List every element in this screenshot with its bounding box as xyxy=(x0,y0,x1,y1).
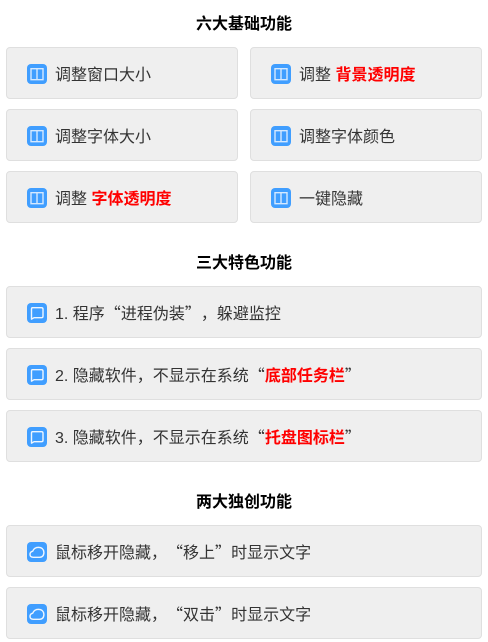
label: 调整窗口大小 xyxy=(55,67,151,84)
heading: two unique functions: 两大独创功能 xyxy=(196,494,292,511)
card: process disguise xyxy=(6,286,482,338)
heading: three special functions: 三大特色功能 xyxy=(196,255,292,272)
label: 调整字体大小 xyxy=(55,129,151,146)
card: double-click to show xyxy=(6,587,482,639)
card: hide from taskbar xyxy=(6,348,482,400)
icon: book xyxy=(271,126,291,146)
card: adjust background opacity xyxy=(250,47,482,99)
icon: book xyxy=(271,64,291,84)
card: adjust font color xyxy=(250,109,482,161)
label: 一键隐藏 xyxy=(299,191,363,208)
icon: book xyxy=(27,126,47,146)
label: 调整字体颜色 xyxy=(299,129,395,146)
label: 2. 隐藏软件，不显示在系统“底部任务栏” xyxy=(55,362,361,386)
icon: book xyxy=(27,188,47,208)
card: hide from tray xyxy=(6,410,482,462)
icon: speech bubble xyxy=(27,365,47,385)
card: adjust window size xyxy=(6,47,238,99)
label: 3. 隐藏软件，不显示在系统“托盘图标栏” xyxy=(55,424,361,448)
label: 调整 背景透明度 xyxy=(299,67,415,84)
card: one-click hide xyxy=(250,171,482,223)
label: 调整 字体透明度 xyxy=(55,191,171,208)
icon: speech bubble xyxy=(27,303,47,323)
heading: six basic functions: 六大基础功能 xyxy=(196,16,292,33)
label: 1. 程序“进程伪装”，躲避监控 xyxy=(55,300,281,324)
card: adjust font opacity xyxy=(6,171,238,223)
card: adjust font size xyxy=(6,109,238,161)
card: hover to show xyxy=(6,525,482,577)
icon: book xyxy=(271,188,291,208)
icon: cloud xyxy=(27,604,47,624)
label: 鼠标移开隐藏，“双击”时显示文字 xyxy=(55,601,311,625)
icon: speech bubble xyxy=(27,427,47,447)
label: 鼠标移开隐藏，“移上”时显示文字 xyxy=(55,539,311,563)
icon: cloud xyxy=(27,542,47,562)
icon: book xyxy=(27,64,47,84)
